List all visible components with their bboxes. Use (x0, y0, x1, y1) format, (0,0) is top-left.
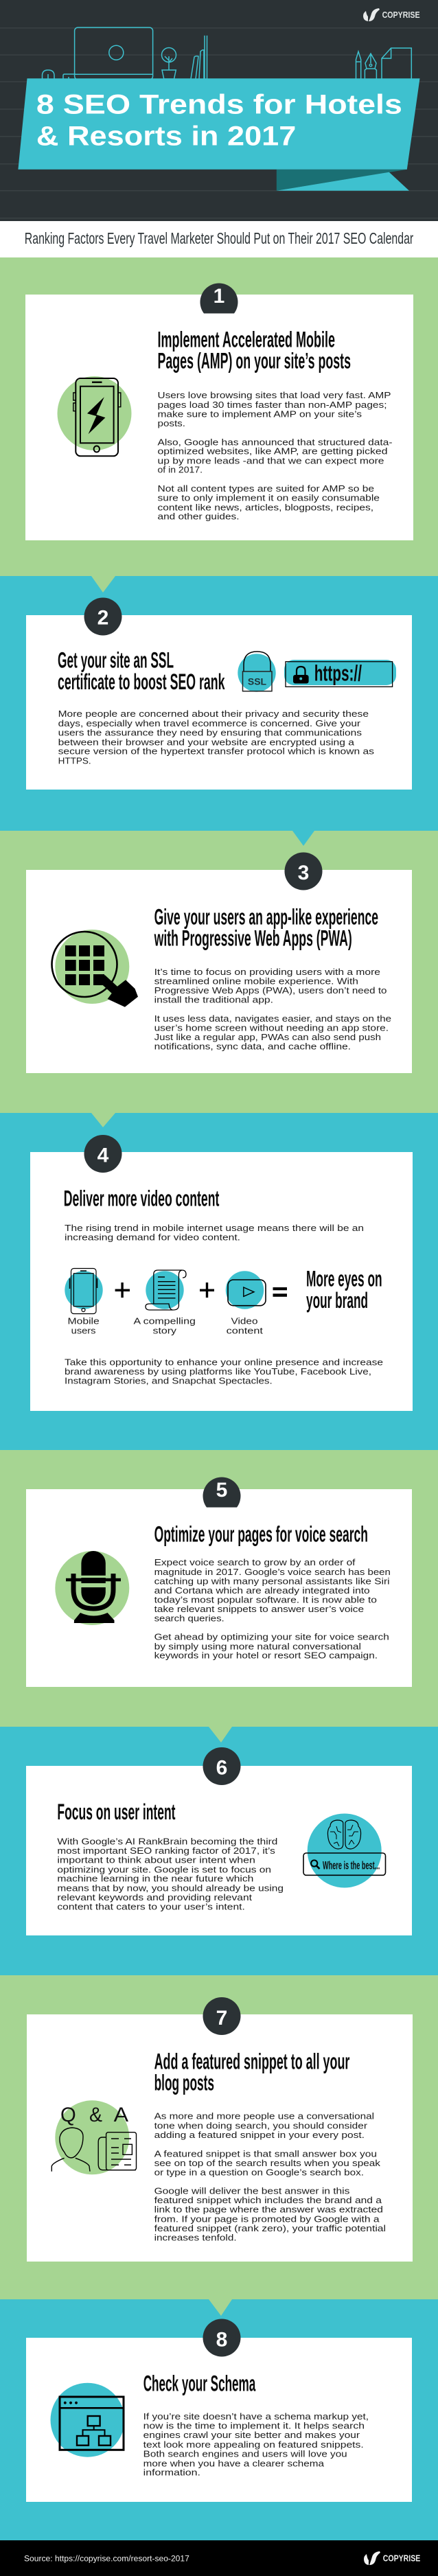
label: mobile users: Mobile (67, 1316, 100, 1326)
subtitle (0, 221, 438, 257)
text block 2: between their browser and your website are encrypted using a (58, 737, 354, 747)
text block 8: now is the time to implement it. It helps search (143, 2422, 365, 2431)
text block 8: more when you have a clearer schema (143, 2459, 324, 2468)
text block 5: today’s most popular software. It is now able to (154, 1595, 377, 1605)
number 5: 5 (216, 1479, 227, 1502)
icon: desk line art (43, 27, 411, 80)
number 3: 3 (298, 862, 309, 884)
text block 3: It uses less data, navigates easier, and stays on the (154, 1014, 391, 1024)
text block 2: secure version of the hypertext transfer protocol which is known as (58, 747, 374, 757)
text block 1: posts. (158, 419, 185, 428)
text block 2 (58, 709, 374, 766)
icon: story scroll (146, 1270, 186, 1310)
text block 7: As more and more people use a conversational (154, 2112, 374, 2121)
plus sign (115, 1283, 130, 1298)
logo: copyrise header (363, 8, 420, 21)
banner (18, 78, 419, 191)
header (0, 0, 438, 221)
text block 8: If you’re site doesn’t have a schema markup yet, (143, 2412, 369, 2422)
heading 3 (154, 905, 378, 951)
text block 4 intro: The rising trend in mobile internet usage means there will be an (65, 1223, 364, 1233)
text block 7: from. If your page is promoted by Google with a (154, 2214, 379, 2224)
text block 5: catching up with many personal assistants like Siri (154, 1576, 390, 1586)
text block 5: search queries. (154, 1613, 224, 1623)
panel: trend 7 featured snippet (0, 1975, 438, 2299)
plus sign (200, 1283, 214, 1298)
callout: more eyes on your brand (306, 1266, 382, 1313)
text block 3: notifications, sync data, and cache offline. (154, 1042, 351, 1052)
text block 8: text look more appealing on featured snippets. (143, 2440, 364, 2450)
title: 8 SEO Trends for Hotels (36, 90, 402, 120)
text block 4 closing: Instagram Stories, and Snapchat Spectacles. (65, 1377, 273, 1386)
text block 4 intro: increasing demand for video content. (65, 1233, 240, 1243)
text block 2: More people are concerned about their privacy and security these (58, 709, 369, 719)
icon: app grid with hand (52, 930, 138, 1007)
text block 3: It’s time to focus on providing users with a more (154, 967, 380, 977)
text block 1: sure to only implement it on easily consumable (158, 494, 380, 503)
text block 5: by simply using more natural conversational (154, 1642, 361, 1651)
heading 4: Deliver more video content (64, 1186, 220, 1211)
text block 2: days, especially when travel ecommerce is concerned. Give your (58, 719, 360, 728)
number 2: 2 (97, 606, 108, 629)
callout: more eyes on your brand: your brand (306, 1288, 368, 1313)
icon: https address bar (284, 660, 396, 687)
title: & Resorts in 2017 (36, 121, 296, 151)
icon: browser window with sitemap (51, 2383, 125, 2457)
text block 5: Get ahead by optimizing your site for voice search (154, 1633, 389, 1642)
icon: mobile users (65, 1269, 103, 1314)
number 3 (284, 853, 323, 890)
text block 7: featured snippet (rank zero), your traffic potential (154, 2224, 386, 2233)
footer (0, 2540, 438, 2576)
text block 3: install the traditional app. (154, 996, 273, 1005)
number 5 (203, 1477, 240, 1508)
label: video content: content (227, 1326, 264, 1335)
panel: trend 2 SSL (0, 576, 438, 831)
text block 7: adding a featured snippet in your every post. (154, 2130, 365, 2140)
text block 5: take relevant snippets to answer user’s voice (154, 1605, 364, 1614)
icon: SSL padlock: SSL (248, 676, 267, 687)
text block 1: and other guides. (158, 512, 239, 522)
text block 7: or type in a question on Google’s search box. (154, 2167, 364, 2177)
text block 2: users the assurance they need by ensuring that communications (58, 728, 362, 738)
text block 7: link to the page where the answer was extracted (154, 2205, 383, 2215)
icon: Q and A with newspaper: Q (60, 2104, 76, 2126)
equals sign (273, 1287, 287, 1297)
text block 1: of in 2017. (158, 465, 203, 475)
label: mobile users (67, 1316, 100, 1335)
text block 6: optimizing your site. Google is set to focus on (57, 1865, 271, 1874)
heading 2: Get your site an SSL (58, 648, 174, 673)
text block 7: Google will deliver the best answer in this (154, 2186, 349, 2196)
text block 6: means that by now, you should already be using (57, 1884, 284, 1894)
panel: trend 5 voice search (0, 1450, 438, 1727)
label: a compelling story (133, 1316, 196, 1335)
label: a compelling story: A compelling (133, 1316, 196, 1326)
text block 6: With Google’s AI RankBrain becoming the third (57, 1837, 277, 1846)
text block 1: Users love browsing sites that load very fast. AMP (158, 391, 391, 400)
text block 5: magnitude in 2017. Google’s voice search has been (154, 1567, 391, 1577)
text block 1: content like news, articles, blogposts, recipes, (158, 503, 373, 512)
text block 6: most important SEO ranking factor of 2017, it’s (57, 1846, 275, 1856)
label: a compelling story: story (152, 1326, 177, 1335)
icon: brain and search box (303, 1814, 386, 1888)
text block 8: engines crawl your site better and makes your (143, 2430, 360, 2440)
heading 1 (158, 327, 351, 373)
text block 3: streamlined online mobile experience. With (154, 977, 358, 987)
number 1 (200, 283, 238, 313)
icon: microphone (55, 1551, 129, 1625)
text block 4 closing: Take this opportunity to enhance your online presence and increase (65, 1357, 383, 1367)
heading 7: blog posts (154, 2071, 214, 2095)
panel: trend 1 AMP (0, 257, 438, 576)
text block 1 (158, 391, 393, 522)
number 6: 6 (216, 1756, 227, 1779)
text block 7: tone when doing search, you should consider (154, 2121, 367, 2131)
icon: https address bar: https:// (314, 661, 362, 686)
text block 5 (154, 1558, 391, 1661)
text block 8: Both search engines and users will love you (143, 2449, 347, 2459)
text block 8 (143, 2412, 369, 2478)
text block 3: Just like a regular app, PWAs can also send push (154, 1033, 381, 1042)
number 1: 1 (214, 285, 224, 308)
text block 6: relevant keywords and providing relevant (57, 1893, 253, 1902)
icon: Q and A with newspaper: A (114, 2104, 128, 2126)
logo: copyrise header: COPYRISE (382, 10, 420, 20)
heading 7 (154, 2049, 349, 2095)
panel: trend 6 user intent (0, 1727, 438, 1975)
number 4 (84, 1135, 122, 1173)
number 8 (203, 2319, 240, 2356)
text block 7: increases tenfold. (154, 2233, 237, 2242)
text block 6 (57, 1837, 284, 1912)
source line: Source: https://copyrise.com/resort-seo-2017 (24, 2554, 189, 2564)
icon: phone with lightning bolt (58, 376, 132, 456)
panel: trend 8 schema (0, 2299, 438, 2540)
heading 2: certificate to boost SEO rank (58, 669, 225, 694)
heading 2 (58, 648, 225, 694)
text block 4 closing: brand awareness by using platforms like YouTube, Facebook Live, (65, 1367, 371, 1377)
number 8: 8 (216, 2328, 227, 2351)
number 7 (203, 1997, 240, 2035)
icon: Q and A with newspaper (51, 2100, 136, 2174)
text block 6: content that caters to your user’s intent. (57, 1902, 245, 1912)
icon: SSL padlock (238, 652, 276, 692)
icon: brain and search box: Where is the best... (323, 1859, 380, 1872)
label: video content (227, 1316, 264, 1335)
text block 7: featured snippet which includes the brand and a (154, 2196, 382, 2205)
text block 4 closing (65, 1357, 383, 1386)
text block 5: Expect voice search to grow by an order of (154, 1558, 356, 1567)
text block 1: make sure to implement AMP on your site’s (158, 409, 362, 419)
text block 8: information. (143, 2468, 200, 2478)
text block 3: user’s home screen without needing an app store. (154, 1024, 389, 1033)
text block 7: A featured snippet is that small answer box you (154, 2149, 377, 2159)
label: mobile users: users (71, 1326, 96, 1335)
text block 1: pages load 30 times faster than non-AMP pages; (158, 400, 387, 410)
label: video content: Video (231, 1316, 258, 1326)
number 2 (84, 597, 122, 636)
logo: copyrise footer (364, 2551, 420, 2565)
panel: trend 3 PWA (0, 831, 438, 1113)
text block 6: important to think about user intent when (57, 1856, 255, 1865)
text block 7: see on top of the search results when you speak (154, 2159, 381, 2168)
icon: video player (226, 1271, 266, 1309)
text block 3: Progressive Web Apps (PWA), users don’t need to (154, 986, 387, 996)
text block 1: Not all content types are suited for AMP so be (158, 484, 374, 494)
text block 1: optimized websites, like AMP, are getting picked (158, 447, 387, 457)
number 4: 4 (97, 1144, 109, 1166)
title (36, 90, 402, 151)
logo: copyrise footer: COPYRISE (383, 2554, 420, 2564)
icon: Q and A with newspaper: & (89, 2104, 102, 2126)
heading 6: Focus on user intent (57, 1799, 176, 1824)
text block 1: up by more leads -and that we can expect more (158, 456, 384, 465)
text block 6: machine learning in the near future which (57, 1874, 253, 1884)
text block 1: Also, Google has announced that structured data- (158, 437, 393, 447)
number 7: 7 (216, 2007, 227, 2029)
text block 5: and Cortana which are already integrated into (154, 1586, 370, 1596)
panel: trend 4 video (0, 1113, 438, 1450)
text block 7 (154, 2112, 386, 2242)
text block 4 intro (65, 1223, 364, 1243)
text block 2: HTTPS. (58, 756, 91, 766)
text block 3 (154, 967, 391, 1052)
text block 5: keywords in your hotel or resort SEO campaign. (154, 1651, 378, 1661)
heading 8: Check your Schema (143, 2371, 255, 2395)
number 6 (203, 1747, 240, 1785)
